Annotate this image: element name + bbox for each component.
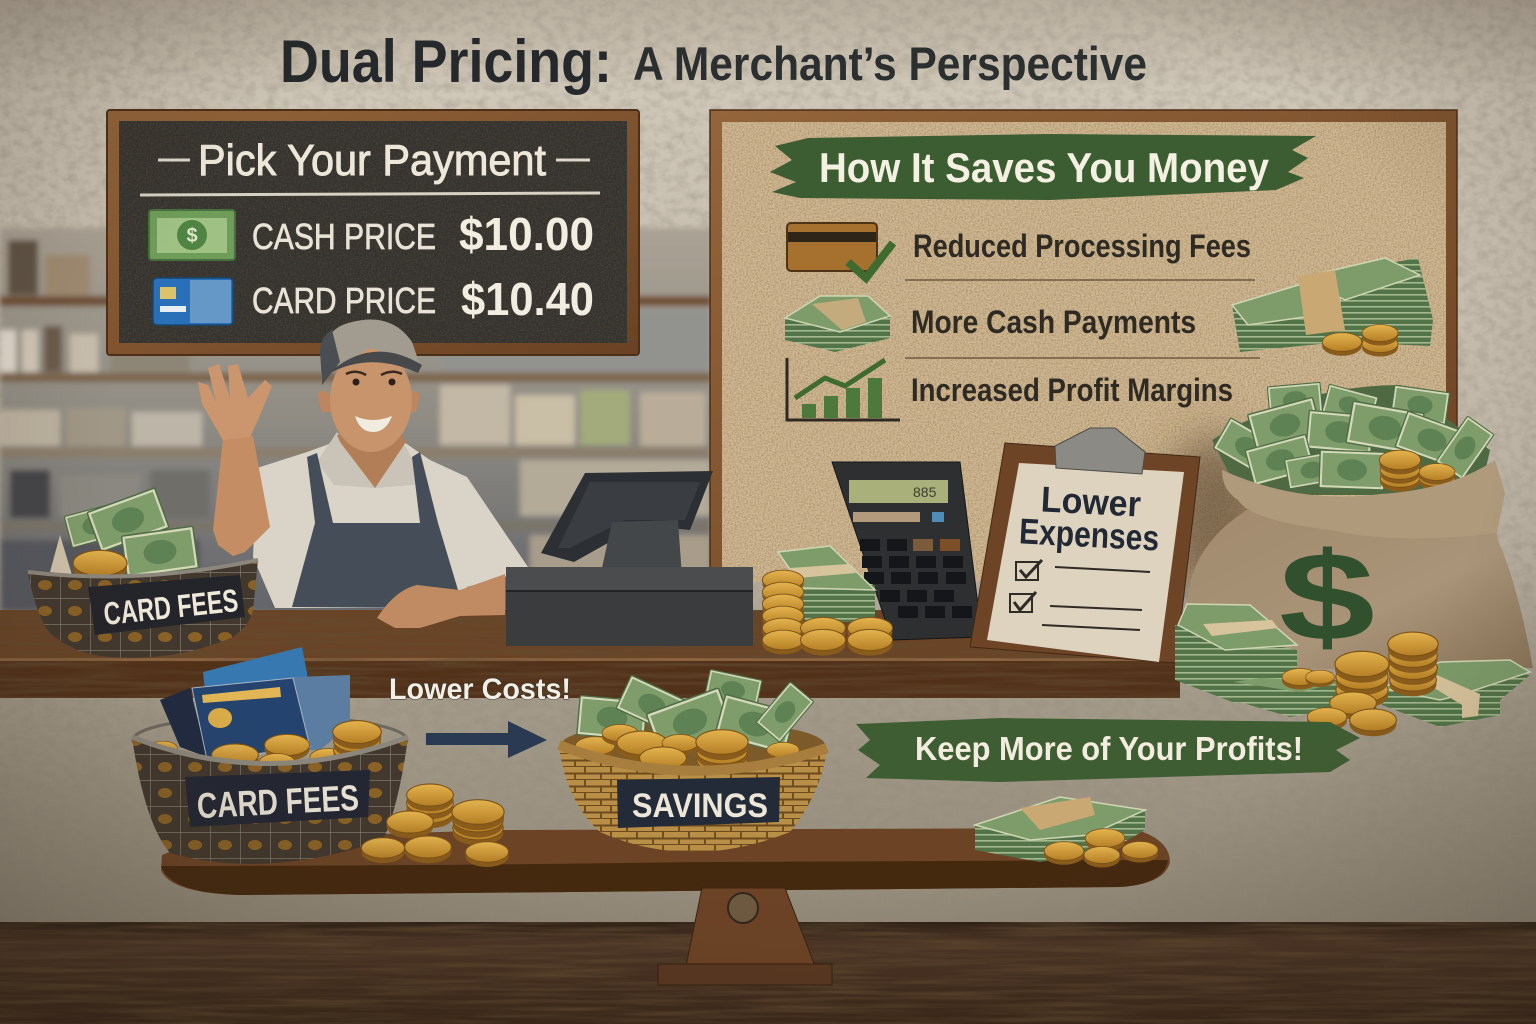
icon: cash bill: $	[186, 225, 198, 247]
panel: how it saves you money corkboard	[710, 110, 1457, 605]
coins beside basket	[361, 784, 509, 867]
money pile right	[1175, 604, 1530, 736]
icon: cash bill	[149, 210, 235, 260]
chalkboard heading: Pick Your Payment	[198, 136, 546, 185]
money sack	[1188, 382, 1533, 670]
green banner heading: How It Saves You Money	[819, 144, 1270, 191]
label: card fees: CARD FEES	[196, 777, 360, 826]
icon: cash stack	[785, 296, 890, 352]
cards in basket	[203, 647, 310, 740]
hand	[198, 364, 272, 440]
floor planks	[0, 922, 1536, 1024]
dollar sign: $	[1279, 526, 1375, 667]
more cash payments: More Cash Payments	[911, 304, 1196, 340]
cash register	[506, 471, 753, 646]
savings basket	[559, 669, 827, 852]
green banner heading	[770, 134, 1316, 200]
label: card fees: CARD FEES	[102, 582, 240, 632]
card price row: CARD PRICE	[252, 280, 436, 321]
ears	[317, 391, 420, 412]
arrow	[426, 721, 547, 758]
icon: growth chart	[787, 358, 900, 420]
label: savings	[617, 777, 780, 828]
clipboard: lower expenses	[970, 428, 1200, 663]
merchant	[198, 320, 530, 628]
face	[330, 348, 412, 452]
green banner: keep more of your profits: Keep More of Your Profits!	[915, 730, 1303, 767]
money and coins by calculator	[762, 546, 892, 656]
neck	[337, 432, 406, 488]
label: card fees	[88, 575, 245, 635]
cash price row: $10.00	[459, 208, 594, 260]
calculator	[832, 462, 982, 640]
clipboard heading: Lower	[1040, 478, 1142, 525]
shirt	[253, 440, 530, 608]
clipboard checklist	[1010, 560, 1150, 630]
seesaw fulcrum	[658, 888, 832, 985]
panel: pick your payment chalkboard	[107, 110, 639, 355]
green banner: keep more of your profits	[856, 718, 1360, 782]
apron	[292, 452, 458, 608]
icon: credit card	[153, 278, 233, 325]
blurred shop shelves	[0, 228, 712, 613]
clipboard clip	[1055, 428, 1145, 474]
counter top	[0, 610, 1180, 698]
reduced processing fees: Reduced Processing Fees	[913, 228, 1251, 264]
label: savings: SAVINGS	[632, 787, 768, 825]
forearm on counter	[377, 574, 505, 628]
seesaw plank	[161, 828, 1170, 895]
left lower basket: card fees	[132, 647, 408, 864]
title: A Merchant’s Perspective	[633, 37, 1147, 90]
left basket: card fees on counter	[28, 488, 258, 658]
card price row	[252, 273, 594, 325]
lower costs label: Lower Costs!	[389, 673, 571, 706]
cash price row	[252, 208, 594, 260]
cash price row: CASH PRICE	[252, 216, 436, 257]
icon: card with check	[787, 223, 893, 278]
title	[280, 28, 1147, 95]
clipboard heading	[1018, 477, 1162, 559]
calculator: 885	[913, 484, 937, 500]
title: Dual Pricing:	[280, 28, 612, 95]
shirt collar	[317, 432, 426, 488]
money on plank	[975, 797, 1158, 868]
clipboard heading: Expenses	[1018, 510, 1160, 559]
raised arm	[213, 436, 270, 556]
cap	[321, 320, 420, 385]
icon: money pile	[1232, 258, 1433, 356]
increased profit margins: Increased Profit Margins	[911, 372, 1233, 408]
card price row: $10.40	[461, 273, 594, 325]
